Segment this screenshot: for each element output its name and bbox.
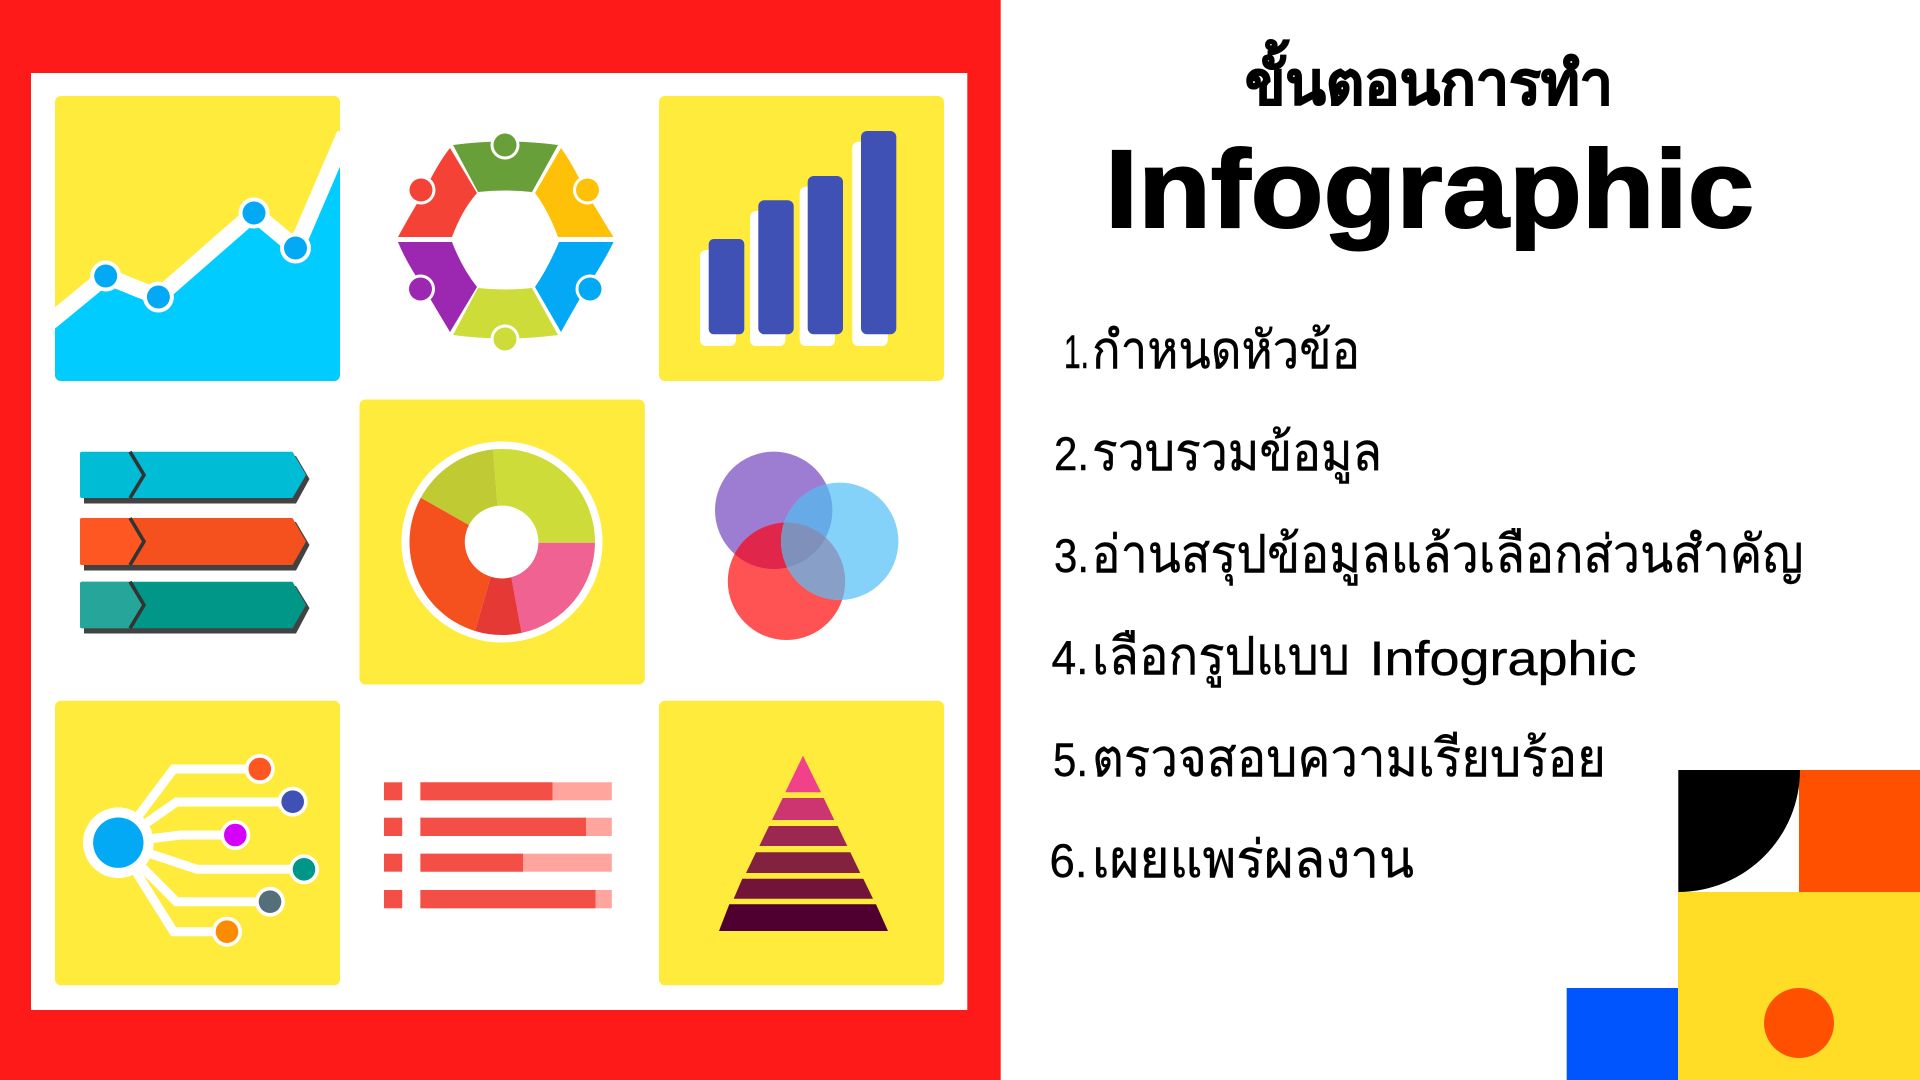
steps list — [1050, 322, 1804, 889]
step 4: เลือกรูปแบบ — [1092, 628, 1350, 688]
step 5: 5. — [1053, 733, 1088, 786]
icon: donut chart tile — [360, 400, 645, 684]
heading: Thai title: ขั้นตอนการทำ — [1245, 39, 1613, 117]
icon: arrow label stack — [80, 452, 310, 634]
icon: venn diagram — [715, 452, 898, 640]
step 4: Infographic — [1370, 633, 1636, 686]
icon: hexagon cycle ring — [398, 130, 614, 354]
step 3: 3. — [1054, 529, 1089, 582]
step 1: 1. — [1064, 325, 1089, 378]
panel: red frame — [0, 0, 1001, 1080]
step 6: 6. — [1050, 834, 1088, 887]
step 4 — [1052, 628, 1636, 688]
step 5: ตรวจสอบความเรียบร้อย — [1092, 730, 1606, 788]
heading: Infographic: Infographic — [1105, 128, 1754, 251]
step 2: รวบรวมข้อมูล — [1092, 424, 1382, 484]
step 6: เผยแพร่ผลงาน — [1092, 831, 1414, 889]
icon: layered pyramid tile — [659, 701, 944, 985]
icon: network nodes tile — [55, 701, 340, 985]
panel: white icon board — [31, 73, 967, 1010]
step 2: 2. — [1054, 427, 1089, 480]
step 3: อ่านสรุปข้อมูลแล้วเลือกส่วนสำคัญ — [1092, 526, 1804, 586]
icon: horizontal progress bars — [384, 782, 612, 908]
icon: bar chart tile — [659, 96, 944, 381]
decoration: geometric corner blocks — [1567, 770, 1920, 1080]
step 1: กำหนดหัวข้อ — [1092, 322, 1360, 380]
step 4: 4. — [1052, 631, 1088, 684]
icon: line and area chart tile — [50, 96, 345, 385]
